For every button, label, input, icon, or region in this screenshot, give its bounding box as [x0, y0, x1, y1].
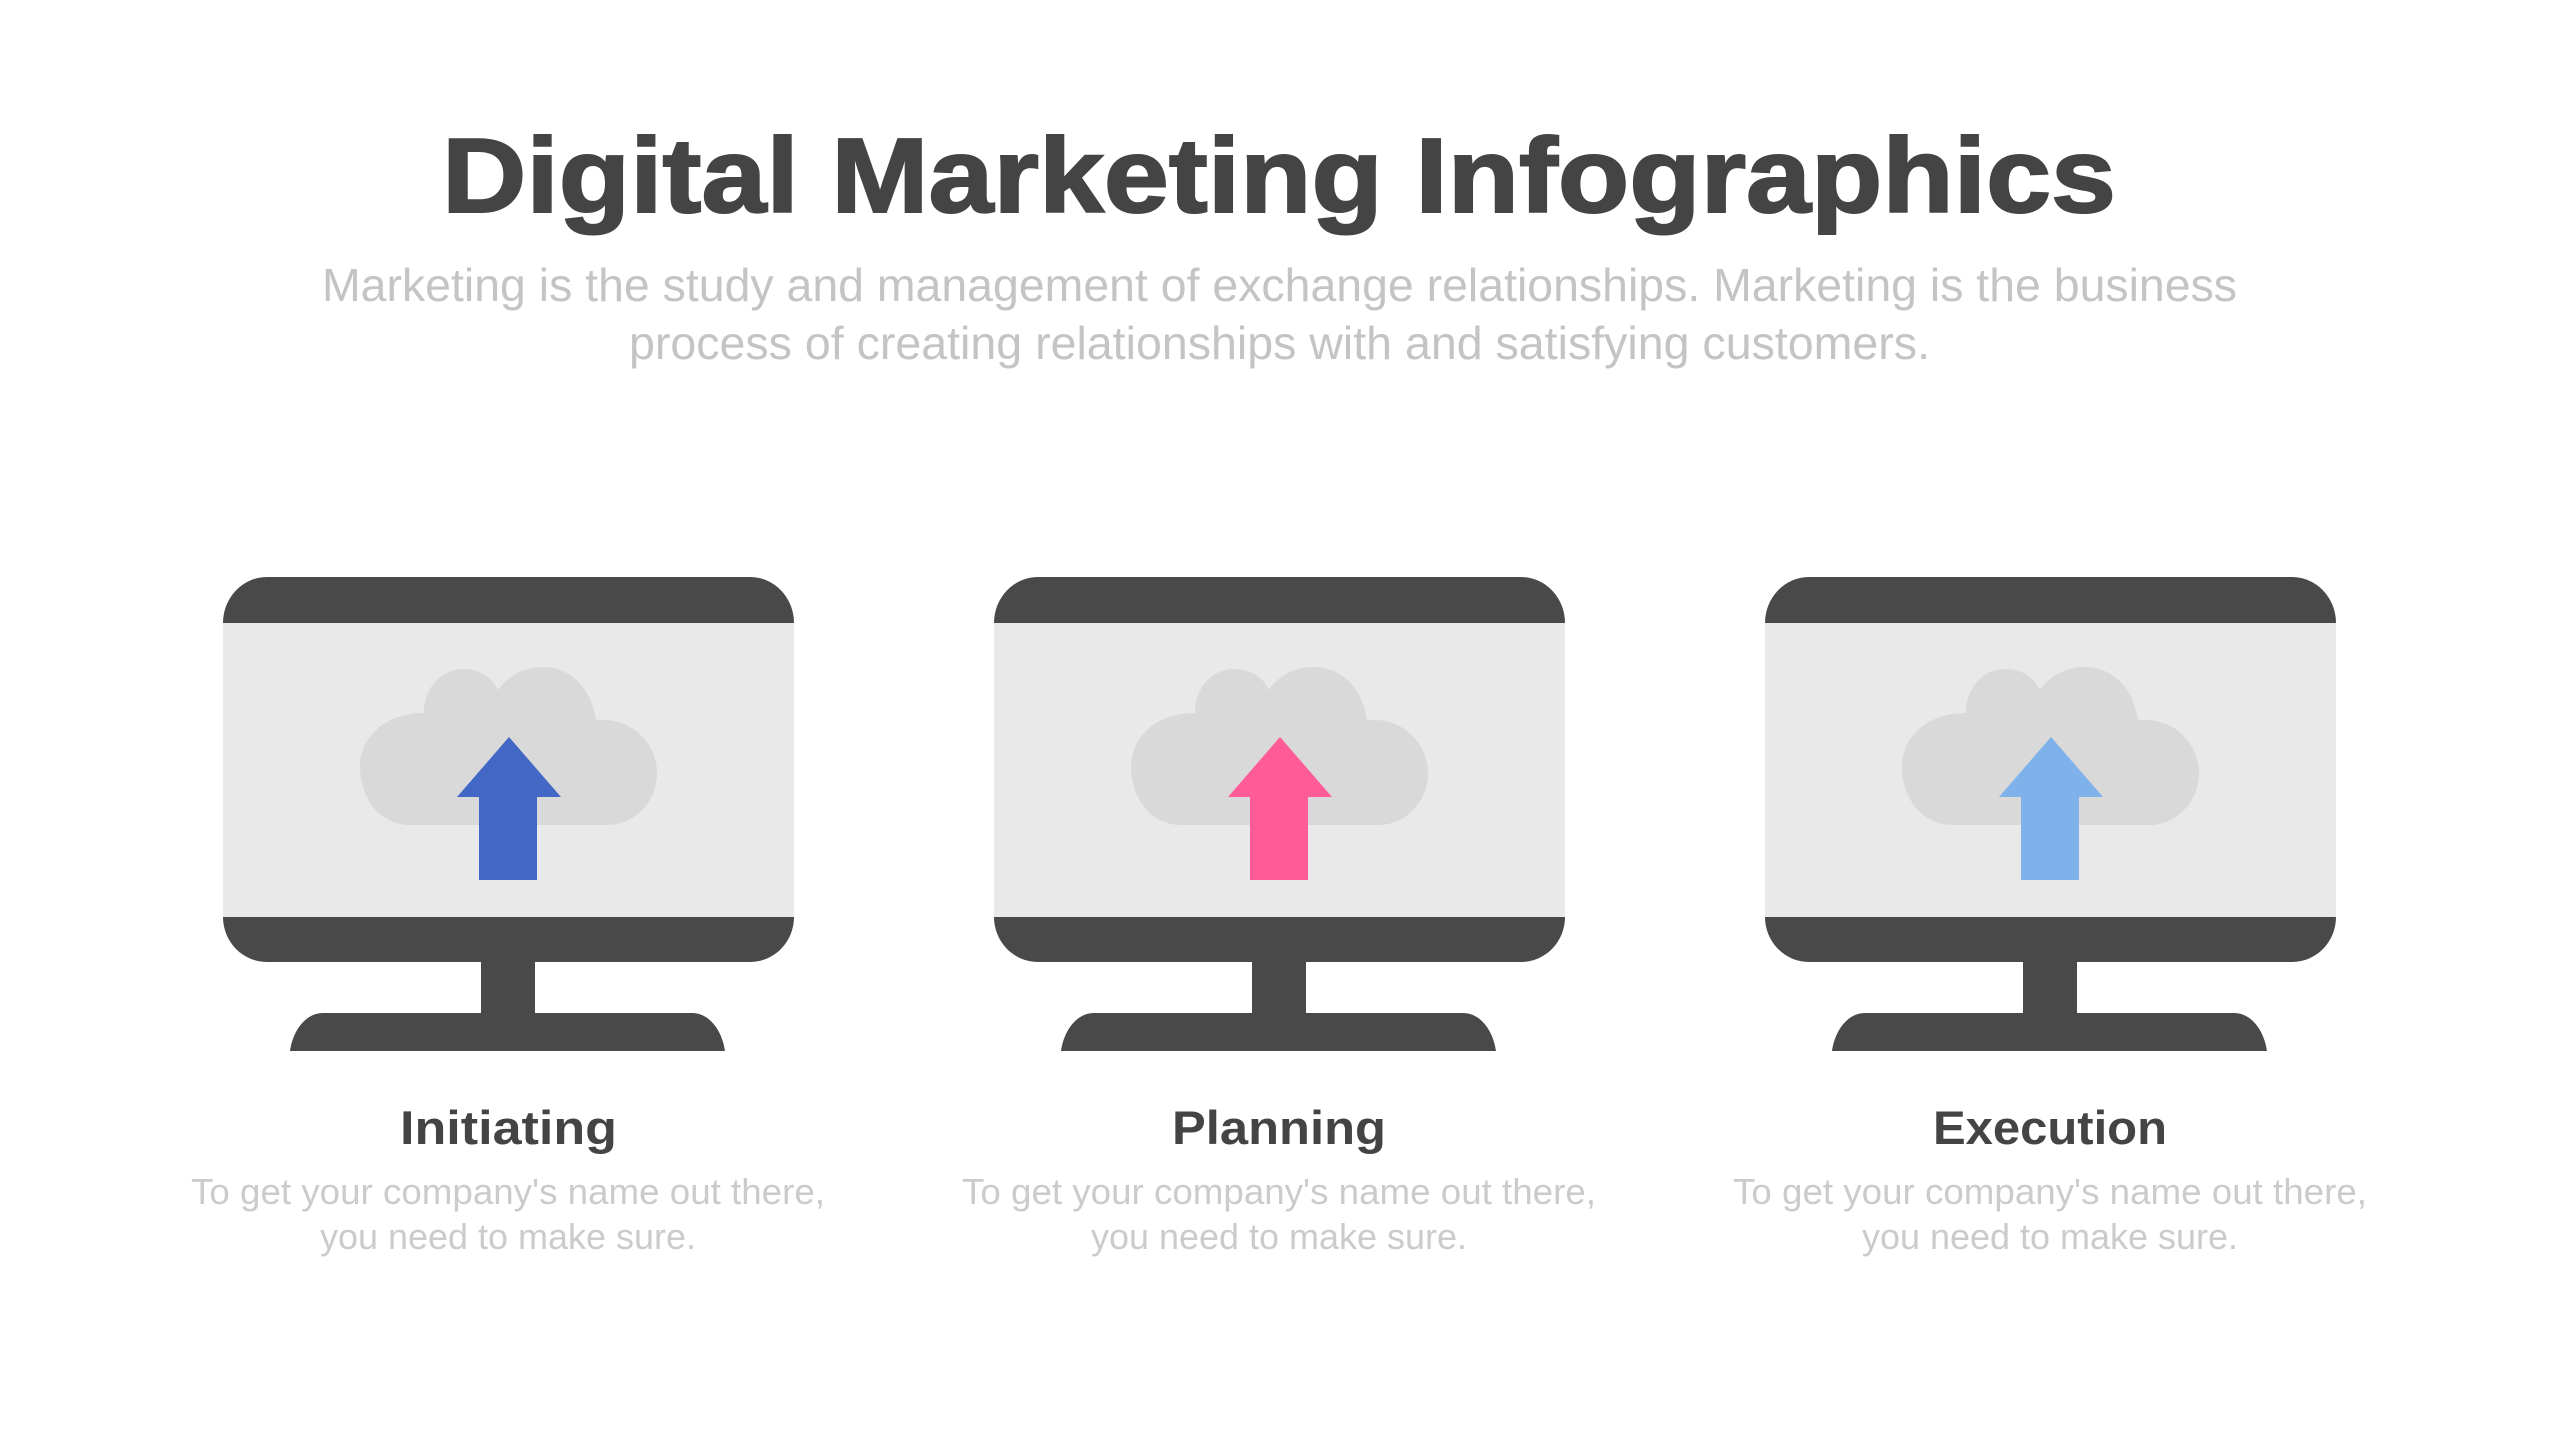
description: Execution: you need to make sure.: [1862, 1216, 2238, 1257]
icon: monitor with blue upload arrow: [223, 577, 794, 1051]
description: Planning: To get your company's name out there,: [962, 1171, 1596, 1212]
subtitle: [322, 259, 2237, 369]
description: Initiating: you need to make sure.: [320, 1216, 696, 1257]
icon: monitor with light blue upload arrow: [1765, 577, 2336, 1051]
description: Initiating: To get your company's name out there,: [191, 1171, 825, 1212]
description: Initiating: [191, 1171, 825, 1257]
panel: planning: [962, 577, 1596, 1257]
subtitle: Marketing is the study and management of exchange relationships. Marketing is the business: [322, 259, 2237, 311]
description: Planning: [962, 1171, 1596, 1257]
subtitle: process of creating relationships with and satisfying customers.: [629, 317, 1930, 369]
panel: initiating: [191, 577, 825, 1257]
heading: Initiating: Initiating: [400, 1101, 617, 1154]
heading: Planning: Planning: [1172, 1101, 1386, 1154]
heading: Execution: Execution: [1933, 1101, 2167, 1154]
panel: execution: [1733, 577, 2367, 1257]
description: Execution: [1733, 1171, 2367, 1257]
description: Planning: you need to make sure.: [1091, 1216, 1467, 1257]
title: Digital Marketing Infographics: [442, 117, 2116, 235]
icon: monitor with pink upload arrow: [994, 577, 1565, 1051]
description: Execution: To get your company's name out there,: [1733, 1171, 2367, 1212]
